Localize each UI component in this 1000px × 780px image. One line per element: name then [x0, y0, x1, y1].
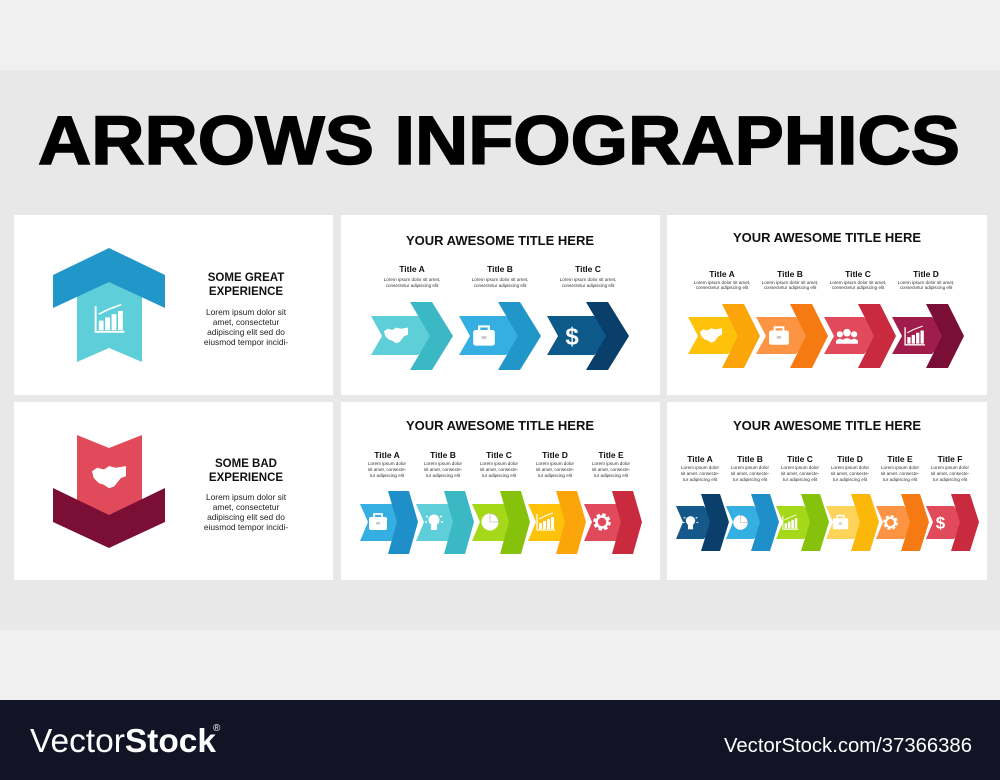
step C: sit amet, consecte-: [781, 471, 820, 476]
step A: Title A: [399, 264, 425, 274]
step A: Title A: [687, 454, 713, 464]
step E: Lorem ipsum dolor: [592, 461, 630, 466]
step E: Lorem ipsum dolor: [881, 465, 919, 470]
step D: Title D: [542, 450, 568, 460]
step E: tur adipiscing elit: [883, 477, 918, 482]
step B: Title B: [737, 454, 763, 464]
step D: consectetur adipiscing elit: [900, 285, 953, 290]
step E: [876, 454, 929, 551]
step D: tur adipiscing elit: [538, 473, 573, 478]
text: some great experience: SOME GREAT: [208, 272, 284, 284]
step D: sit amet, consecte-: [831, 471, 870, 476]
step D: sit amet, consecte-: [536, 467, 575, 472]
panel: 3 steps: [341, 215, 660, 395]
step A: consectetur adipiscing elit: [696, 285, 749, 290]
step D: Lorem ipsum dolor sit amet,: [898, 280, 954, 285]
footer: [0, 700, 1000, 780]
text: some great experience: Lorem ipsum dolor sit: [206, 307, 287, 317]
step A: [371, 264, 453, 370]
step B: Title B: [487, 264, 513, 274]
panel: bad experience: [14, 402, 333, 580]
step A: Lorem ipsum dolor sit amet,: [384, 277, 440, 282]
step B: tur adipiscing elit: [733, 477, 768, 482]
step A: Title A: [374, 450, 400, 460]
step B: Title B: [777, 269, 803, 279]
step E: Title E: [598, 450, 624, 460]
step D: [826, 454, 879, 551]
text: some bad experience: amet, consectetur: [213, 502, 279, 512]
step E: [584, 450, 642, 554]
step C: [472, 450, 530, 554]
icon: up arrow: [53, 248, 165, 362]
step A: [688, 269, 760, 368]
text: some bad experience: [204, 458, 288, 532]
step E: tur adipiscing elit: [594, 473, 629, 478]
step F: [926, 454, 979, 551]
step B: Title B: [430, 450, 456, 460]
heading: YOUR AWESOME TITLE HERE: [406, 418, 594, 433]
step C: [824, 269, 896, 368]
step C: tur adipiscing elit: [783, 477, 818, 482]
step B: consectetur adipiscing elit: [474, 283, 527, 288]
text: some great experience: eiusmod tempor incidi-: [204, 337, 288, 347]
step B: Lorem ipsum dolor: [424, 461, 462, 466]
step D: Lorem ipsum dolor: [536, 461, 574, 466]
step D: Title D: [913, 269, 939, 279]
step A: [676, 454, 729, 551]
step B: [756, 269, 828, 368]
text: some bad experience: Lorem ipsum dolor sit: [206, 492, 287, 502]
heading: YOUR AWESOME TITLE HERE: [733, 418, 921, 433]
step C: Lorem ipsum dolor sit amet,: [560, 277, 616, 282]
panel: great experience: [14, 215, 333, 395]
step A: Lorem ipsum dolor: [368, 461, 406, 466]
step C: consectetur adipiscing elit: [832, 285, 885, 290]
step D: [892, 269, 964, 368]
panel: 4 steps: [667, 215, 987, 395]
step E: Title E: [887, 454, 913, 464]
text: some great experience: EXPERIENCE: [209, 286, 283, 298]
text: some great experience: adipiscing elit sed do: [207, 327, 285, 337]
step B: sit amet, consecte-: [731, 471, 770, 476]
step B: Lorem ipsum dolor sit amet,: [472, 277, 528, 282]
step B: [459, 264, 541, 370]
panel: 5 steps: [341, 402, 660, 580]
step F: tur adipiscing elit: [933, 477, 968, 482]
step C: Title C: [787, 454, 813, 464]
step C: [547, 264, 629, 370]
step B: [416, 450, 474, 554]
step F: Title F: [938, 454, 962, 464]
text: some bad experience: eiusmod tempor incidi-: [204, 522, 288, 532]
text: some bad experience: adipiscing elit sed do: [207, 512, 285, 522]
heading: YOUR AWESOME TITLE HERE: [733, 230, 921, 245]
text: some bad experience: EXPERIENCE: [209, 472, 283, 484]
step A: tur adipiscing elit: [370, 473, 405, 478]
step E: sit amet, consecte-: [881, 471, 920, 476]
step D: [528, 450, 586, 554]
step C: Lorem ipsum dolor sit amet,: [830, 280, 886, 285]
panel: 6 steps: [667, 402, 987, 580]
step A: sit amet, consecte-: [368, 467, 407, 472]
step A: [360, 450, 418, 554]
text: some great experience: amet, consectetur: [213, 317, 279, 327]
step B: tur adipiscing elit: [426, 473, 461, 478]
text: some bad experience: SOME BAD: [215, 458, 277, 470]
footer url: VectorStock.com/37366386: [724, 735, 972, 757]
text: some great experience: [204, 272, 288, 347]
step D: tur adipiscing elit: [833, 477, 868, 482]
background band: [0, 70, 1000, 630]
step D: Title D: [837, 454, 863, 464]
step A: Title A: [709, 269, 735, 279]
step C: consectetur adipiscing elit: [562, 283, 615, 288]
footer: ®: [213, 723, 221, 734]
step A: Lorem ipsum dolor sit amet,: [694, 280, 750, 285]
step B: [726, 454, 779, 551]
step C: Title C: [845, 269, 871, 279]
footer logo: VectorStock: [30, 722, 217, 759]
step B: consectetur adipiscing elit: [764, 285, 817, 290]
step A: Lorem ipsum dolor: [681, 465, 719, 470]
step B: sit amet, consecte-: [424, 467, 463, 472]
step A: consectetur adipiscing elit: [386, 283, 439, 288]
step B: Lorem ipsum dolor: [731, 465, 769, 470]
step C: [776, 454, 829, 551]
title: ARROWS INFOGRAPHICS: [38, 102, 960, 179]
step F: sit amet, consecte-: [931, 471, 970, 476]
step E: sit amet, consecte-: [592, 467, 631, 472]
step F: Lorem ipsum dolor: [931, 465, 969, 470]
step A: sit amet, consecte-: [681, 471, 720, 476]
step B: Lorem ipsum dolor sit amet,: [762, 280, 818, 285]
step A: tur adipiscing elit: [683, 477, 718, 482]
step C: Lorem ipsum dolor: [781, 465, 819, 470]
step C: tur adipiscing elit: [482, 473, 517, 478]
step C: Title C: [486, 450, 512, 460]
icon: down arrow: [53, 435, 165, 548]
heading: YOUR AWESOME TITLE HERE: [406, 233, 594, 248]
step C: Lorem ipsum dolor: [480, 461, 518, 466]
step C: sit amet, consecte-: [480, 467, 519, 472]
step D: Lorem ipsum dolor: [831, 465, 869, 470]
step C: Title C: [575, 264, 601, 274]
